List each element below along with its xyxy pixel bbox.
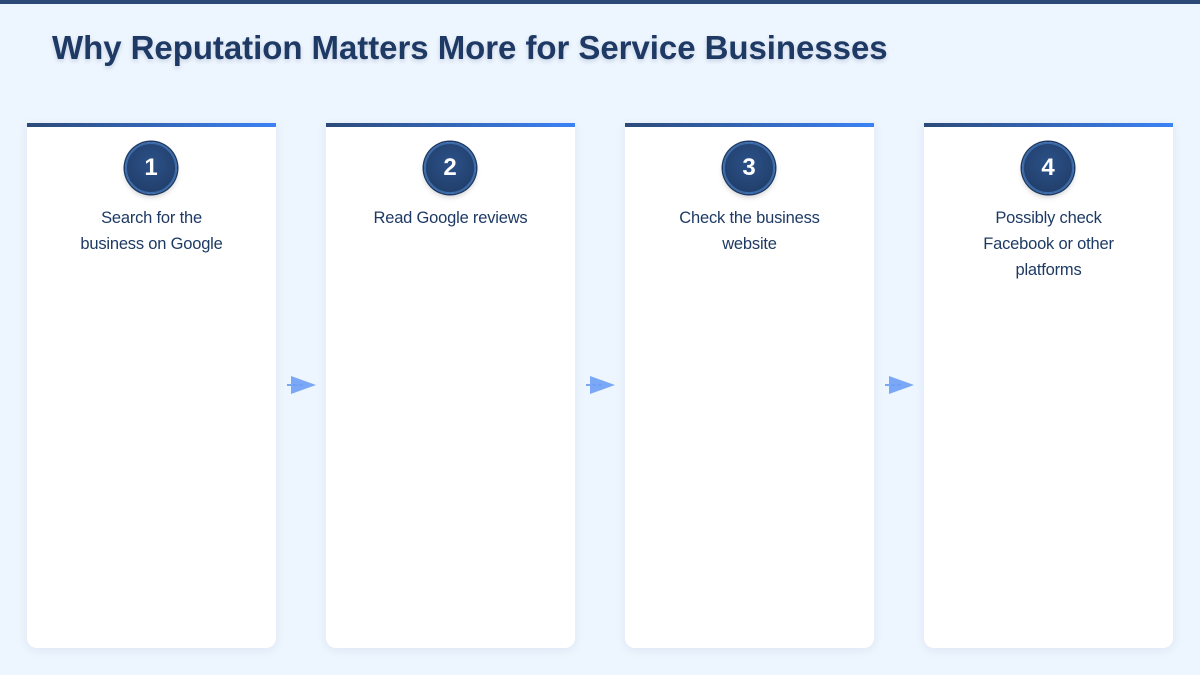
panel: step 1 [27,123,276,648]
text: step 3: Check the business [679,209,820,227]
icon: number 1: 1 [144,154,158,181]
text: step 4: Facebook or other [983,235,1114,253]
icon: number 4: 4 [1041,154,1055,181]
icon: number 4 [1022,142,1074,194]
arrow 1 [287,376,316,394]
panel: step 4 [924,123,1173,648]
panel: step 2 [326,123,575,648]
text: step 1: business on Google [80,235,223,253]
text: step 4: Possibly check [995,209,1102,227]
icon: number 1 [125,142,177,194]
text: step 1: Search for the [101,209,202,227]
icon: number 2: 2 [443,154,457,181]
text: step 4: platforms [1015,261,1082,279]
icon: number 3: 3 [742,154,756,181]
icon: number 3 [723,142,775,194]
text: step 3: website [722,235,777,253]
text: step 3 [679,209,820,253]
arrow 3 [885,376,914,394]
panel: step 3 [625,123,874,648]
icon: number 2 [424,142,476,194]
text: step 4 [983,209,1114,279]
arrow 2 [586,376,615,394]
title: Why Reputation Matters More for Service Businesses [52,29,888,66]
text: step 2: Read Google reviews [374,209,527,227]
text: step 1 [80,209,223,253]
